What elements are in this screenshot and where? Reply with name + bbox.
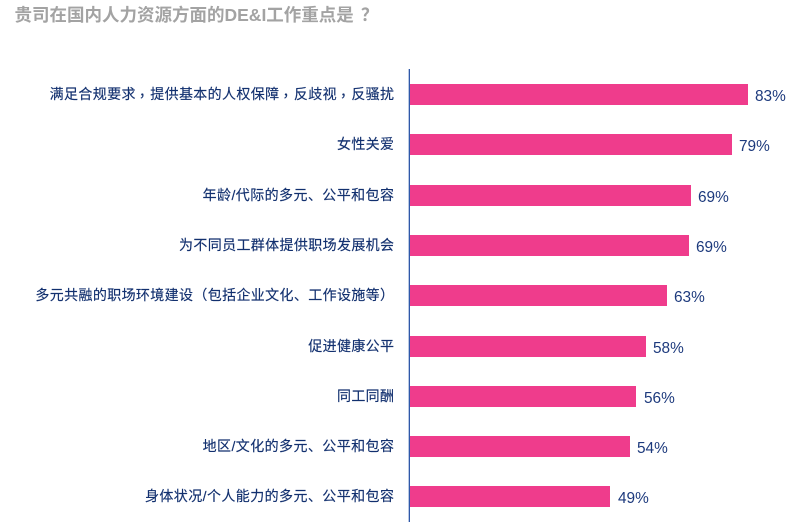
bar row: 79%: 79% (739, 138, 770, 154)
bar row: 69% age: 年龄/代际的多元、公平和包容 (203, 187, 394, 203)
bar row: 69% age: 69% (698, 188, 729, 206)
bar row: 83%: 满足合规要求，提供基本的人权保障，反歧视，反骚扰 (50, 84, 394, 102)
bar row: 69% development (179, 235, 727, 256)
bar row: 54%: 54% (637, 440, 668, 456)
bar row: 49% (145, 486, 649, 507)
bar row: 56%: 同工同酬 (337, 388, 394, 404)
bar row: 49%: 身体状况/个人能力的多元、公平和包容 (145, 488, 394, 504)
bar row: 54%: 地区/文化的多元、公平和包容 (203, 438, 394, 454)
chart axis (409, 69, 410, 522)
bar row: 56% (337, 386, 675, 407)
bar row: 79%: 女性关爱 (337, 136, 394, 152)
bar row: 54% (203, 436, 668, 457)
bar row: 83% (50, 84, 786, 105)
bar row: 49%: 49% (618, 490, 649, 506)
bar row: 63%: 多元共融的职场环境建设（包括企业文化、工作设施等） (35, 287, 394, 303)
bar row: 58% (308, 336, 684, 357)
bar row: 56%: 56% (644, 390, 675, 406)
bar row: 63% (35, 285, 705, 306)
bar row: 69% age (203, 185, 729, 206)
bar row: 79% (337, 134, 770, 155)
bar row: 83%: 83% (755, 88, 786, 104)
title: 贵司在国内人力资源方面的DE&I工作重点是 ？ (14, 5, 378, 25)
bar row: 69% development: 为不同员工群体提供职场发展机会 (179, 237, 394, 253)
bar row: 58%: 58% (653, 340, 684, 356)
bar row: 69% development: 69% (696, 238, 727, 256)
bar row: 58%: 促进健康公平 (308, 338, 394, 354)
bar row: 63%: 63% (674, 288, 705, 306)
